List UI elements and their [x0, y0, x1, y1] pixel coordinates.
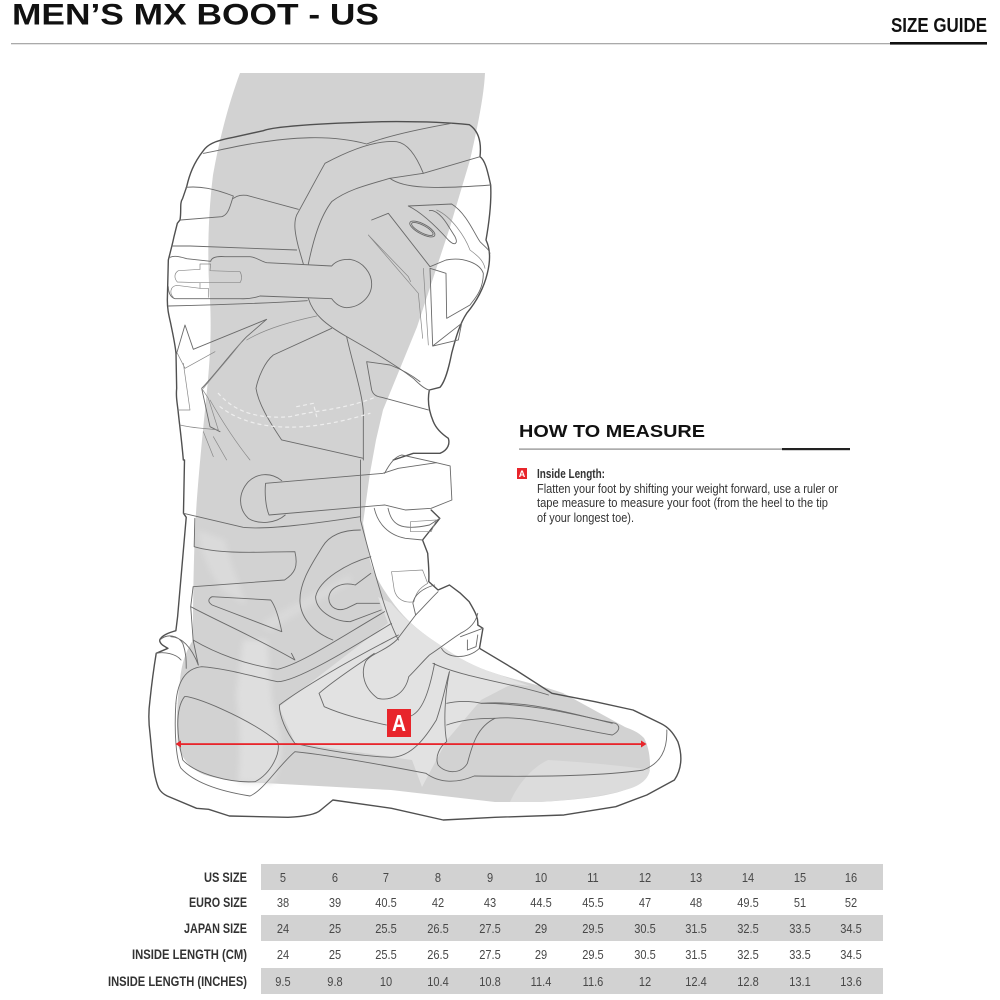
row: US size: 15 — [794, 870, 806, 885]
row: US size: US SIZE — [204, 869, 247, 885]
instructions — [517, 467, 838, 525]
row: Euro size: 42 — [432, 895, 444, 910]
row: Euro size: 52 — [845, 895, 857, 910]
row: US size: 9 — [487, 870, 493, 885]
heading rule — [519, 448, 850, 450]
row: US size — [204, 864, 883, 890]
row: Euro size — [189, 894, 857, 910]
row: Euro size: 49.5 — [737, 895, 759, 910]
row: inside length inches: 10 — [380, 974, 392, 989]
row: Euro size: 48 — [690, 895, 702, 910]
instructions: Inside Length: — [537, 467, 605, 481]
row: Japan size: 25.5 — [375, 921, 397, 936]
row: Euro size: 44.5 — [530, 895, 552, 910]
row: inside length inches: 12 — [639, 974, 651, 989]
sole line — [178, 697, 278, 782]
row: inside length inches: 12.4 — [685, 974, 707, 989]
row: inside length inches: 10.4 — [427, 974, 449, 989]
star logo — [177, 319, 267, 432]
measure arrow — [176, 740, 646, 748]
row: inside length cm: 29.5 — [582, 947, 604, 962]
lower buckle strap — [265, 463, 452, 515]
upper shell band — [183, 513, 360, 528]
side logo — [372, 213, 483, 346]
lower outline — [149, 460, 681, 820]
collar lines — [203, 123, 452, 153]
row: Euro size: 39 — [329, 895, 341, 910]
row: Euro size: 45.5 — [582, 895, 604, 910]
row: US size: 7 — [383, 870, 389, 885]
row: US size: 16 — [845, 870, 857, 885]
calf panels — [191, 518, 296, 665]
row: Japan size: 30.5 — [634, 921, 656, 936]
row: inside length cm: 30.5 — [634, 947, 656, 962]
row: Euro size: 40.5 — [375, 895, 397, 910]
foot shell — [176, 623, 392, 703]
row: inside length inches: 12.8 — [737, 974, 759, 989]
row: inside length cm: 24 — [277, 947, 289, 962]
row: inside length inches: 10.8 — [479, 974, 501, 989]
row: US size: 10 — [535, 870, 547, 885]
instructions: tape measure to measure your foot (from the heel to the tip — [537, 496, 828, 510]
row: Japan size: 29 — [535, 921, 547, 936]
upper boot line art — [167, 122, 491, 460]
row: Japan size: 25 — [329, 921, 341, 936]
header rule — [11, 42, 987, 45]
row: Japan size: 24 — [277, 921, 289, 936]
logo script — [218, 393, 377, 427]
row: inside length inches: 13.6 — [840, 974, 862, 989]
row: Euro size: 47 — [639, 895, 651, 910]
row: inside length inches: 11.4 — [531, 974, 552, 989]
how to measure heading: HOW TO MEASURE — [519, 421, 705, 441]
ankle strap — [363, 592, 478, 699]
row: US size: 13 — [690, 870, 702, 885]
row: Euro size: 43 — [484, 895, 496, 910]
row: inside length cm: 31.5 — [685, 947, 707, 962]
row: Japan size: 29.5 — [582, 921, 604, 936]
row: US size: 11 — [587, 870, 599, 885]
row: inside length cm: 27.5 — [479, 947, 501, 962]
row: Japan size: 34.5 — [840, 921, 862, 936]
row: Japan size: 26.5 — [427, 921, 449, 936]
row: inside length cm: 29 — [535, 947, 547, 962]
row: Japan size: JAPAN SIZE — [184, 920, 247, 936]
row: US size: 5 — [280, 870, 286, 885]
A marker — [387, 709, 411, 737]
leg silhouette and foot shading — [177, 73, 650, 802]
row: inside length cm: 25.5 — [375, 947, 397, 962]
A marker: A — [392, 710, 406, 736]
upper buckle strap — [168, 256, 372, 308]
size table — [108, 864, 883, 994]
row: Japan size — [184, 915, 883, 941]
row: inside length inches: INSIDE LENGTH (INCHES) — [108, 973, 247, 989]
row: inside length cm: 26.5 — [427, 947, 449, 962]
row: US size: 8 — [435, 870, 441, 885]
row: Japan size: 33.5 — [789, 921, 811, 936]
row: Euro size: 51 — [794, 895, 806, 910]
row: inside length cm: 34.5 — [840, 947, 862, 962]
instructions: of your longest toe). — [537, 511, 634, 525]
lower boot line art — [149, 455, 681, 820]
row: US size: 6 — [332, 870, 338, 885]
row: inside length cm: 33.5 — [789, 947, 811, 962]
row: inside length inches: 9.8 — [327, 974, 343, 989]
row: US size: 12 — [639, 870, 651, 885]
row: inside length inches: 9.5 — [275, 974, 291, 989]
upper outline — [167, 122, 491, 460]
row: inside length inches: 13.1 — [789, 974, 811, 989]
row: Euro size: EURO SIZE — [189, 894, 247, 910]
instructions: A — [519, 469, 526, 479]
row: Euro size: 38 — [277, 895, 289, 910]
lower shin panels — [256, 328, 363, 458]
shin and tongue lines — [360, 460, 398, 640]
row: inside length cm: 25 — [329, 947, 341, 962]
row: inside length cm: INSIDE LENGTH (CM) — [132, 946, 247, 962]
row: inside length inches: 11.6 — [583, 974, 604, 989]
row: inside length cm: 32.5 — [737, 947, 759, 962]
row: Japan size: 27.5 — [479, 921, 501, 936]
row: inside length inches — [108, 968, 883, 994]
row: US size: 14 — [742, 870, 754, 885]
row: inside length cm — [132, 946, 862, 962]
instructions: Flatten your foot by shifting your weight forward, use a ruler or — [537, 482, 838, 496]
row: Japan size: 31.5 — [685, 921, 707, 936]
row: Japan size: 32.5 — [737, 921, 759, 936]
